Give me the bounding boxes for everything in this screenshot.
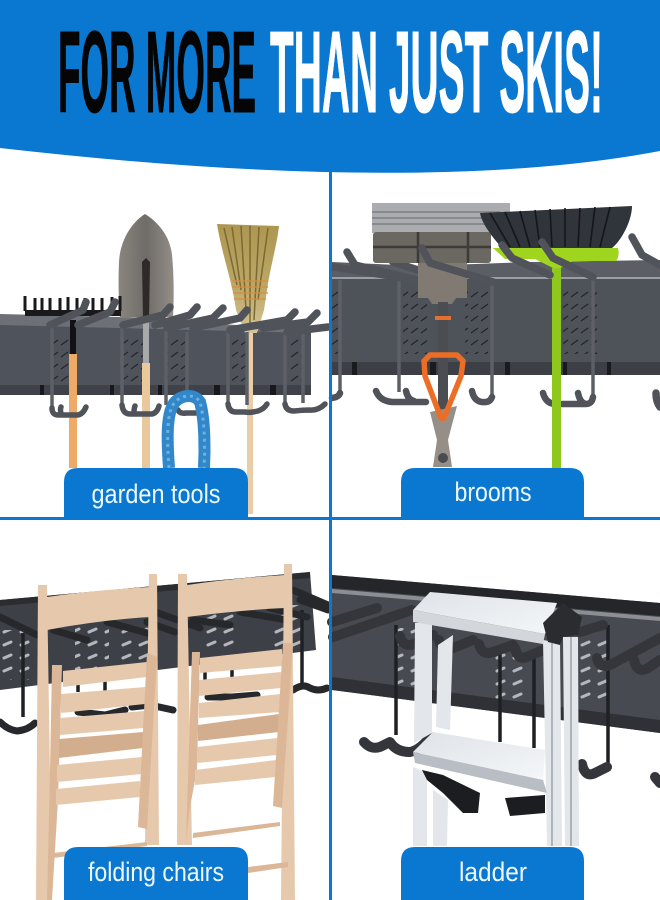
label: folding chairs xyxy=(64,847,248,900)
wall rack xyxy=(0,572,316,717)
panel: ladder xyxy=(332,575,660,900)
mop xyxy=(372,203,510,467)
panel: folding chairs xyxy=(0,564,328,900)
wall rack xyxy=(332,260,660,375)
rope xyxy=(168,396,205,468)
rake xyxy=(25,296,121,468)
label: brooms xyxy=(401,468,584,517)
label: garden tools xyxy=(64,468,248,517)
panel: brooms xyxy=(332,203,660,517)
chair: right xyxy=(177,564,295,900)
storage hooks: back xyxy=(332,252,660,407)
chair: left xyxy=(36,574,159,900)
label: brooms: brooms xyxy=(454,477,532,507)
step ladder xyxy=(413,592,582,846)
label: ladder: ladder xyxy=(459,857,527,887)
label: folding chairs: folding chairs xyxy=(88,857,224,887)
storage hooks xyxy=(332,608,660,783)
label: ladder xyxy=(401,847,584,900)
wall rack xyxy=(0,314,311,395)
storage hooks xyxy=(50,302,328,415)
panel: garden tools xyxy=(0,214,328,517)
header banner xyxy=(0,0,660,173)
broom xyxy=(217,224,279,514)
shovel xyxy=(119,214,174,468)
storage hooks xyxy=(0,590,328,731)
storage hooks: front xyxy=(422,237,660,282)
green broom xyxy=(480,206,632,468)
label: garden tools: garden tools xyxy=(92,479,220,509)
wall rack xyxy=(332,575,660,767)
